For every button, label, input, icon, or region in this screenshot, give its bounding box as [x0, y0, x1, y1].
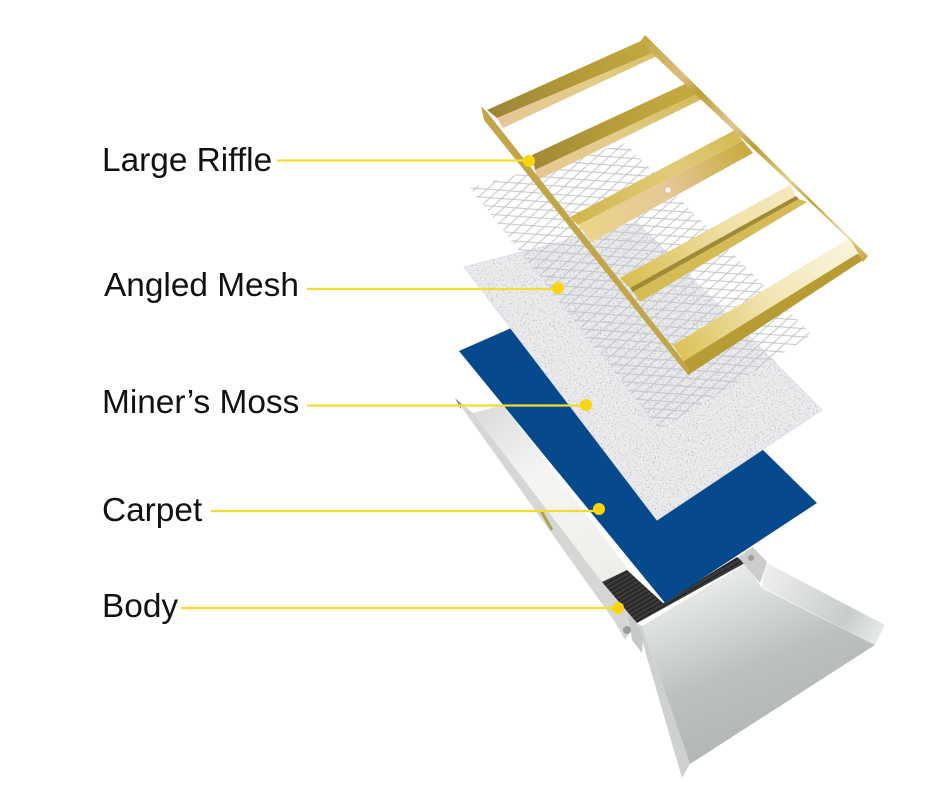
label: Angled Mesh: Angled Mesh	[104, 267, 299, 304]
carpet	[459, 290, 817, 603]
label: Carpet	[102, 492, 605, 529]
leader line and dot	[277, 155, 535, 167]
chute floor	[473, 405, 640, 585]
angled mesh	[470, 143, 812, 430]
bar 3	[570, 130, 743, 225]
lower bracket	[628, 613, 643, 653]
label: Carpet: Carpet	[102, 492, 203, 529]
bar 1	[487, 40, 655, 118]
leader line and dot	[307, 399, 592, 411]
chute wall tip	[455, 398, 461, 409]
black riffle matting	[602, 557, 745, 623]
scoop right wall	[762, 562, 885, 645]
upper bracket	[738, 547, 767, 583]
leader line and dot	[307, 282, 564, 294]
scoop left wall	[637, 623, 690, 778]
small yellow sticker on wall	[540, 511, 553, 531]
bar 4	[620, 185, 796, 288]
label: Large Riffle	[102, 142, 535, 179]
miner's moss	[460, 218, 826, 524]
leader line and dot	[211, 503, 605, 515]
right rail	[640, 35, 868, 262]
label: Miner's Moss: Miner’s Moss	[102, 384, 299, 421]
label: Large Riffle: Large Riffle	[102, 142, 272, 179]
wing bolts	[748, 555, 754, 561]
left rail	[481, 106, 689, 375]
label: Body: Body	[102, 588, 178, 625]
leader line and dot	[181, 602, 624, 614]
hole in bar 3	[666, 188, 670, 192]
bar 5	[673, 238, 857, 361]
label: Miner's Moss	[102, 384, 592, 421]
large riffle: gold frame	[481, 35, 868, 375]
label: Angled Mesh	[104, 267, 564, 304]
body: metal sluice chute	[455, 398, 885, 778]
scoop flare floor	[642, 564, 875, 764]
label: Body	[102, 588, 624, 625]
chute side wall	[455, 398, 637, 640]
bar 2	[532, 83, 697, 170]
